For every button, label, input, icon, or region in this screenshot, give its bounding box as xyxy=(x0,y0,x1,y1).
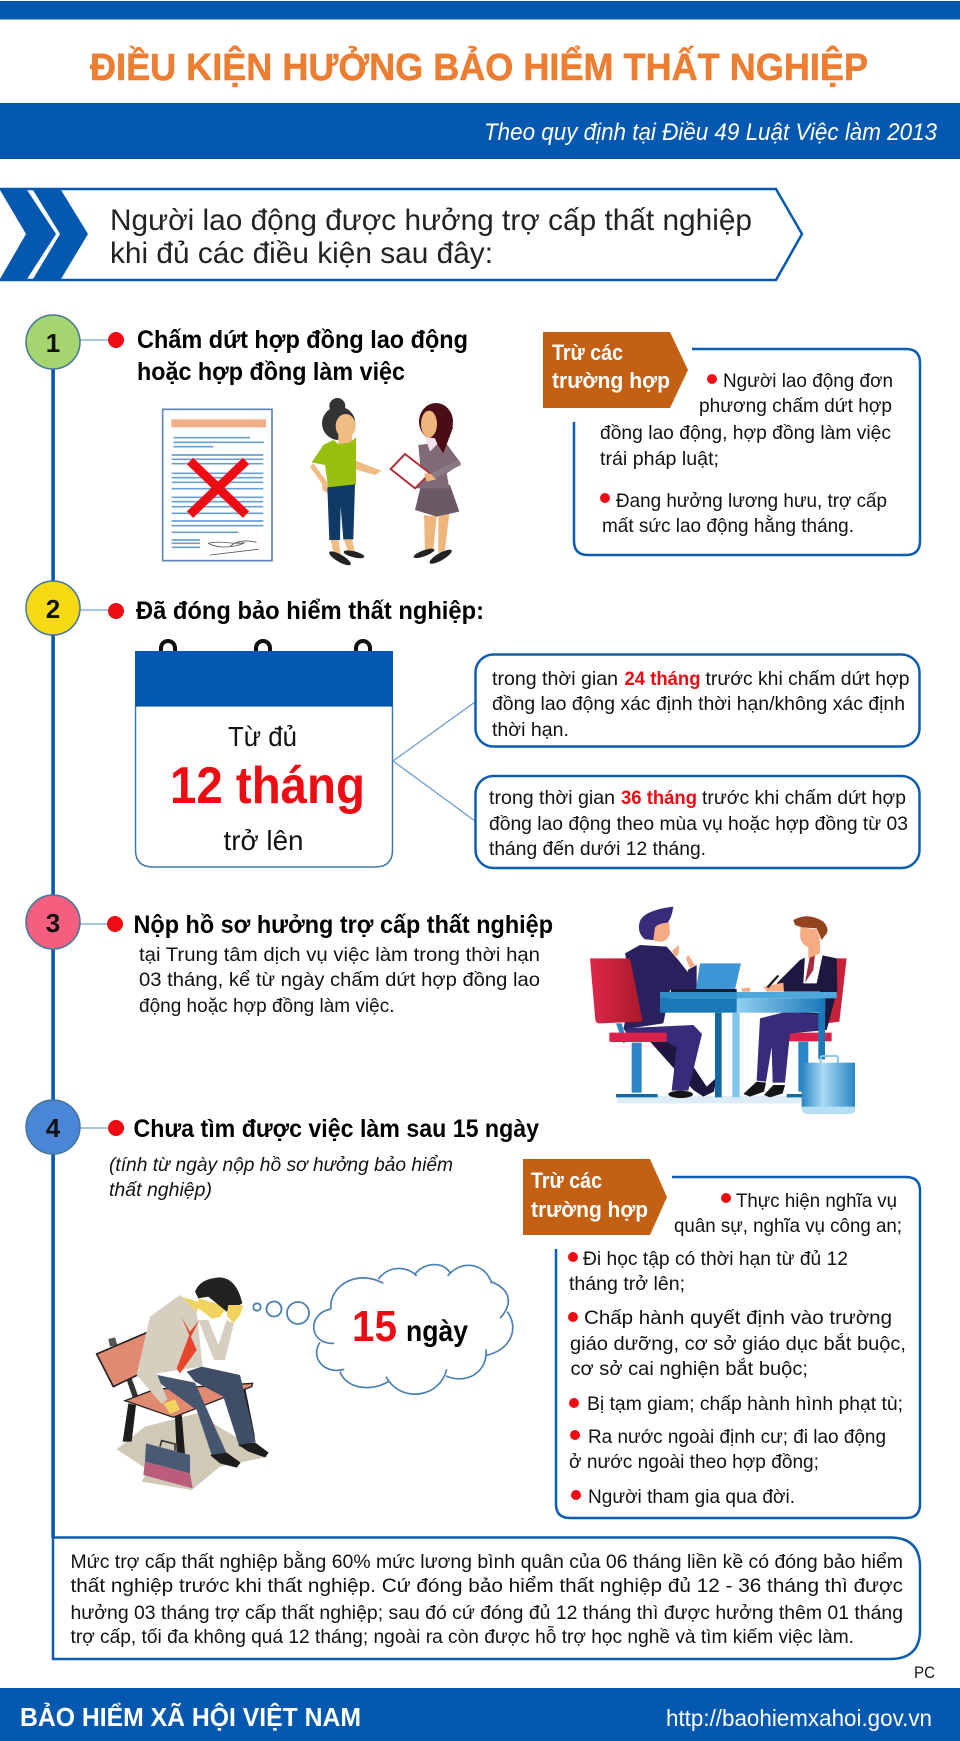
step 2 number badge xyxy=(26,581,80,635)
calendar: trở lên xyxy=(224,825,304,856)
calendar: 12 tháng xyxy=(170,757,365,815)
step 3 heading: Nộp hồ sơ hưởng trợ cấp thất nghiệp xyxy=(134,911,553,939)
cloud: 15 days xyxy=(312,1265,513,1395)
step 1 number badge xyxy=(26,315,80,369)
step 1 heading xyxy=(137,326,468,386)
step 2 xyxy=(26,581,484,635)
step 3 number badge xyxy=(26,895,80,949)
exceptions text: mất sức lao động hằng tháng. xyxy=(602,514,854,537)
step 2 heading: Đã đóng bảo hiểm thất nghiệp: xyxy=(136,597,484,625)
icon: woman with clipboard xyxy=(391,403,461,566)
step 3 description xyxy=(139,944,540,1017)
exceptions text: tháng trở lên; xyxy=(569,1273,685,1295)
exceptions text: Người lao động đơn xyxy=(723,370,893,392)
step 3 description: động hoặc hợp đồng làm việc. xyxy=(139,995,394,1017)
desk xyxy=(660,992,837,1097)
exceptions text: Bị tạm giam; chấp hành hình phạt tù; xyxy=(587,1393,903,1415)
exceptions text: trái pháp luật; xyxy=(600,448,719,470)
step 4 number badge: 4 xyxy=(46,1113,61,1143)
step 1 bullet xyxy=(108,332,124,348)
icon: cancelled contract xyxy=(163,409,272,561)
exceptions frame xyxy=(574,349,920,555)
left person xyxy=(623,907,717,1098)
callout: 24 months: đồng lao động xác định thời hạn/không xác định xyxy=(492,693,905,715)
step 1 number badge: 1 xyxy=(46,328,60,358)
calendar connectors xyxy=(393,702,475,821)
callout: 36 months xyxy=(476,776,920,868)
step 4 bullet xyxy=(108,1120,124,1136)
timeline line xyxy=(51,342,55,1538)
benefit summary panel: trợ cấp, tối đa không quá 12 tháng; ngoài ra còn được hỗ trợ học nghề và tìm kiếm việc làm. xyxy=(70,1625,854,1648)
callout: 24 months: thời hạn. xyxy=(492,719,569,741)
exceptions text: Đang hưởng lương hưu, trợ cấp xyxy=(616,490,887,512)
briefcase xyxy=(802,1056,855,1114)
intro arrow banner xyxy=(0,189,802,280)
benefit summary panel: hưởng 03 tháng trợ cấp thất nghiệp; sau đó cứ đóng đủ 12 tháng thì được hưởng thêm 01 tháng xyxy=(70,1602,903,1624)
callout: 36 months: tháng đến dưới 12 tháng. xyxy=(489,838,706,860)
exceptions text: Ra nước ngoài định cư; đi lao động xyxy=(588,1426,886,1448)
step 3 description: 03 tháng, kể từ ngày chấm dứt hợp đồng lao xyxy=(139,969,540,991)
callout: 36 months: đồng lao động theo mùa vụ hoặc hợp đồng từ 03 xyxy=(489,813,908,835)
step 3 connector xyxy=(80,923,108,925)
thought bubbles xyxy=(253,1302,309,1324)
step 1 connector xyxy=(80,339,108,341)
footer bar xyxy=(0,1688,960,1741)
title: ĐIỀU KIỆN HƯỞNG BẢO HIỂM THẤT NGHIỆP xyxy=(90,44,868,89)
exceptions panel 2 xyxy=(523,1159,920,1518)
benefit summary panel: Mức trợ cấp thất nghiệp bằng 60% mức lương bình quân của 06 tháng liền kề có đóng bảo hiểm xyxy=(70,1550,903,1573)
exceptions text: cơ sở cai nghiện bắt buộc; xyxy=(570,1357,808,1380)
callout: 24 months xyxy=(476,654,920,746)
exceptions tag xyxy=(543,332,688,408)
callout: 24 months: 24 tháng xyxy=(624,668,700,690)
step 4 heading: Chưa tìm được việc làm sau 15 ngày xyxy=(134,1115,539,1143)
calendar: Từ đủ xyxy=(228,721,297,752)
callout: 36 months: trong thời gian xyxy=(489,787,615,809)
benefit summary panel: thất nghiệp trước khi thất nghiệp. Cứ đóng bảo hiểm thất nghiệp đủ 12 - 36 tháng thì được xyxy=(70,1575,903,1597)
benefit summary panel xyxy=(53,1538,920,1659)
callout: 24 months: trong thời gian xyxy=(492,668,618,690)
exceptions text: Thực hiện nghĩa vụ xyxy=(736,1190,897,1212)
step 3 description: tại Trung tâm dịch vụ việc làm trong thời hạn xyxy=(139,944,540,966)
subtitle band xyxy=(0,103,960,159)
exceptions text xyxy=(568,1190,906,1508)
step 4 note xyxy=(109,1154,453,1201)
cloud: 15 days: ngày xyxy=(406,1315,468,1348)
footer bar: BẢO HIỂM XÃ HỘI VIỆT NAM xyxy=(20,1702,361,1732)
exceptions panel 1 xyxy=(543,332,920,555)
exceptions tag xyxy=(523,1159,667,1235)
right chair xyxy=(787,958,847,1097)
step 3 xyxy=(26,895,553,1017)
step 2 number badge: 2 xyxy=(46,594,60,624)
intro arrow banner: khi đủ các điều kiện sau đây: xyxy=(110,237,493,270)
laptop xyxy=(671,963,741,992)
exceptions text: quân sự, nghĩa vụ công an; xyxy=(674,1215,902,1237)
icon: woman in green shirt xyxy=(310,398,382,568)
exceptions text: phương chấm dứt hợp xyxy=(699,395,892,417)
top blue bar xyxy=(0,1,960,20)
right person xyxy=(742,916,837,1097)
left chair xyxy=(590,958,667,1097)
step 2 connector xyxy=(80,609,108,611)
step 4 connector xyxy=(80,1127,108,1129)
exceptions text: Người tham gia qua đời. xyxy=(588,1486,795,1508)
exceptions tag: Trừ các xyxy=(552,340,623,365)
exceptions text xyxy=(600,370,893,537)
step 1 heading: Chấm dứt hợp đồng lao động xyxy=(137,326,468,354)
callout: 36 months: 36 tháng xyxy=(621,787,697,809)
icon: job consultation at desk xyxy=(590,907,855,1114)
exceptions tag: Trừ các xyxy=(531,1168,602,1193)
step 4 note: (tính từ ngày nộp hồ sơ hưởng bảo hiểm xyxy=(109,1154,453,1176)
step 2 bullet xyxy=(108,603,124,619)
step 1 heading: hoặc hợp đồng làm việc xyxy=(137,358,405,386)
exceptions text: giáo dưỡng, cơ sở giáo dục bắt buộc, xyxy=(570,1332,906,1355)
step 4 number badge xyxy=(26,1100,80,1154)
exceptions tag: trường hợp xyxy=(552,368,670,393)
step 4 note: thất nghiệp) xyxy=(109,1179,212,1201)
step 1 xyxy=(26,315,468,386)
step 3 number badge: 3 xyxy=(46,908,60,938)
step 3 bullet xyxy=(107,916,123,932)
exceptions text: Chấp hành quyết định vào trường xyxy=(584,1307,892,1329)
exceptions frame xyxy=(556,1177,920,1518)
step 4 xyxy=(26,1100,539,1201)
footer bar: http://baohiemxahoi.gov.vn xyxy=(666,1705,932,1731)
callout: 36 months: trước khi chấm dứt hợp xyxy=(702,787,906,809)
cloud: 15 days: 15 xyxy=(352,1302,397,1351)
exceptions text: ở nước ngoài theo hợp đồng; xyxy=(569,1451,819,1473)
author initials: PC xyxy=(914,1663,935,1682)
subtitle band: Theo quy định tại Điều 49 Luật Việc làm 2013 xyxy=(484,119,938,146)
exceptions text: đồng lao động, hợp đồng làm việc xyxy=(600,422,891,444)
calendar xyxy=(135,641,393,867)
callout: 24 months: trước khi chấm dứt hợp xyxy=(706,668,910,690)
exceptions text: Đi học tập có thời hạn từ đủ 12 xyxy=(583,1248,848,1270)
calendar rings xyxy=(161,641,370,652)
intro arrow banner: Người lao động được hưởng trợ cấp thất nghiệp xyxy=(110,204,752,237)
icon: worried man on bench xyxy=(97,1277,269,1490)
exceptions tag: trường hợp xyxy=(531,1197,648,1222)
